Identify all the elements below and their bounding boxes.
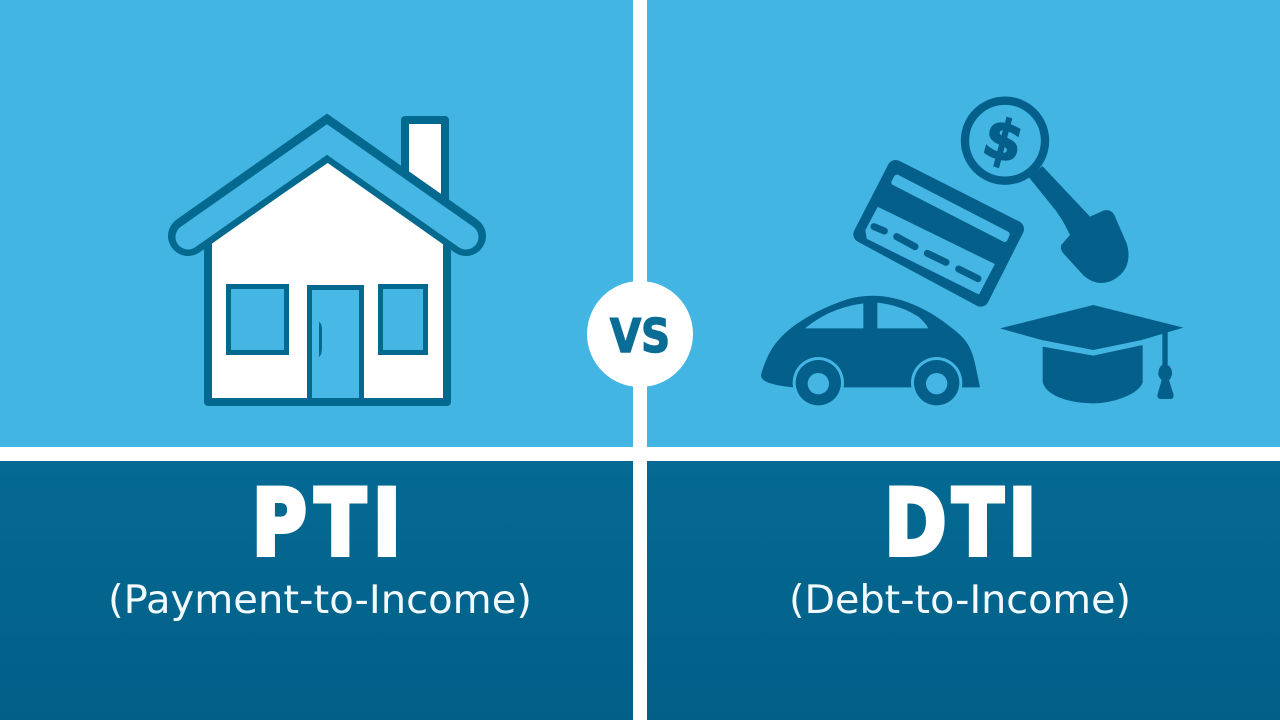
panel: DTI label background bbox=[647, 461, 1280, 720]
DTI heading: DTI bbox=[885, 470, 1036, 576]
door bbox=[310, 288, 362, 400]
PTI subtitle: (Payment-to-Income) bbox=[108, 578, 532, 623]
DTI subtitle: (Debt-to-Income) bbox=[789, 578, 1131, 623]
icon: graduation cap bbox=[1000, 305, 1183, 403]
house body bbox=[208, 158, 447, 402]
chimney bbox=[405, 120, 445, 215]
PTI heading: PTI bbox=[252, 470, 401, 576]
icon: car bbox=[761, 296, 980, 408]
VS badge bbox=[587, 281, 693, 387]
panel: PTI label background bbox=[0, 461, 633, 720]
divider: vertical white bar bbox=[633, 0, 647, 720]
divider: horizontal white bar bbox=[0, 447, 1280, 461]
left window bbox=[228, 286, 286, 352]
icon: magnifier with dollar and shovel: $ bbox=[976, 104, 1030, 176]
icon: credit card bbox=[862, 168, 1016, 298]
icon: magnifier with dollar and shovel bbox=[965, 101, 1129, 283]
panel: DTI illustration background bbox=[647, 0, 1280, 447]
right window bbox=[380, 286, 426, 352]
icon: house bbox=[188, 120, 466, 402]
panel: PTI illustration background bbox=[0, 0, 633, 447]
VS badge: VS bbox=[610, 309, 670, 363]
roof bbox=[188, 138, 466, 237]
